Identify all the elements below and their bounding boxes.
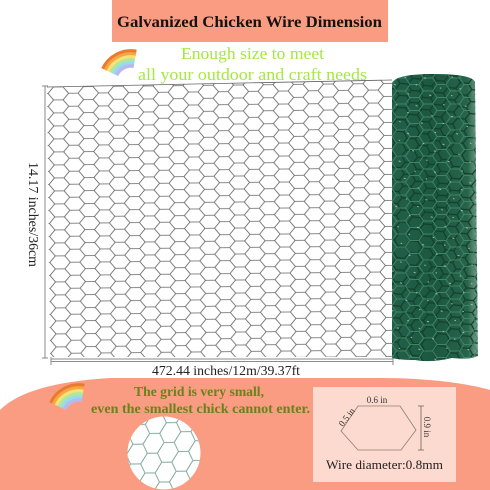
label 0.9 in: 0.9 in bbox=[422, 417, 432, 438]
icon: rainbow bottom bbox=[51, 385, 84, 409]
panel: hexagon dimensions bbox=[313, 387, 456, 482]
grid caption bbox=[91, 384, 310, 416]
chicken wire mesh sheet bbox=[47, 80, 392, 357]
height dimension line bbox=[42, 86, 48, 358]
wire roll bbox=[392, 74, 478, 361]
circular mesh close-up bbox=[128, 416, 200, 490]
hexagon diagram bbox=[341, 406, 416, 450]
label 0.6 in: 0.6 in bbox=[367, 395, 388, 405]
bottom orange panel bbox=[0, 378, 490, 490]
icon: rainbow top bbox=[103, 51, 136, 75]
width label: 472.44 inches/12m/39.37ft bbox=[152, 363, 300, 378]
height label: 14.17 inches/36cm bbox=[26, 162, 41, 268]
wire diameter: Wire diameter:0.8mm bbox=[326, 458, 443, 472]
height bracket bbox=[418, 406, 424, 450]
title bbox=[112, 0, 388, 42]
subtitle: all your outdoor and craft needs bbox=[138, 65, 367, 84]
grid caption: even the smallest chick cannot enter. bbox=[91, 401, 310, 416]
subtitle: Enough size to meet bbox=[181, 44, 324, 63]
title: Galvanized Chicken Wire Dimension bbox=[117, 14, 382, 31]
subtitle bbox=[138, 44, 367, 84]
label 0.5 in: 0.5 in bbox=[336, 406, 357, 428]
width dimension line bbox=[51, 357, 393, 365]
grid caption: The grid is very small, bbox=[134, 384, 264, 399]
